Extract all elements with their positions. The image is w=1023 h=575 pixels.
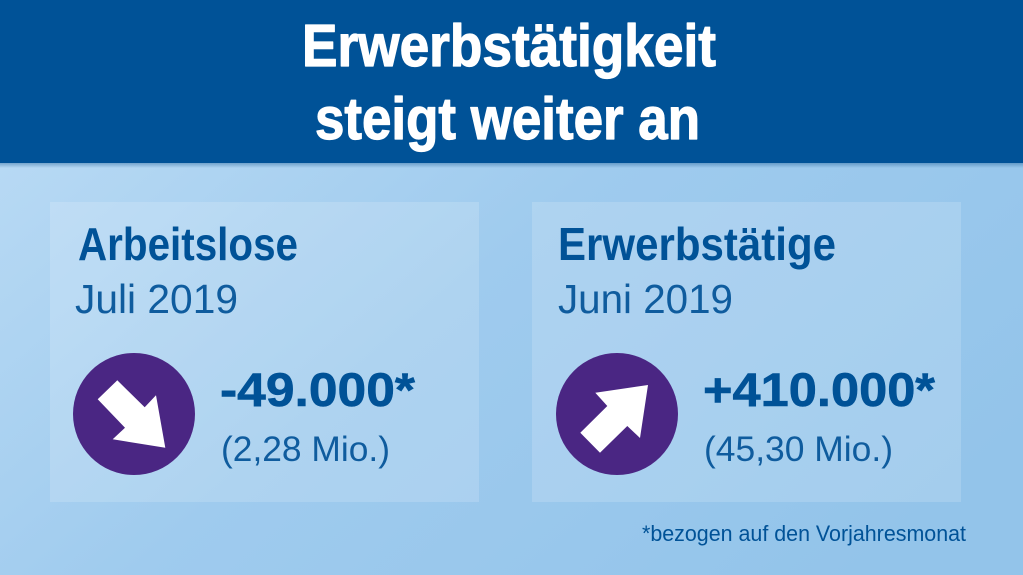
icon: arrow down in circle xyxy=(73,353,195,475)
title: Erwerbstätigkeit xyxy=(302,13,716,79)
heading: Arbeitslose: Arbeitslose xyxy=(78,218,298,270)
panel: Arbeitslose xyxy=(50,202,479,502)
footnote: *bezogen auf den Vorjahresmonat xyxy=(642,521,966,546)
panel: Erwerbstätige xyxy=(532,202,961,502)
text: 45,30 Mio.: (45,30 Mio.) xyxy=(704,430,893,469)
title: steigt weiter an xyxy=(315,86,700,152)
text: 2,28 Mio.: (2,28 Mio.) xyxy=(221,430,390,469)
icon: arrow up in circle xyxy=(556,353,678,475)
value: -49.000*: -49.000* xyxy=(220,363,416,416)
text: Juni 2019: Juni 2019 xyxy=(558,276,733,322)
panel: title banner xyxy=(0,0,1023,163)
heading: Erwerbstätige: Erwerbstätige xyxy=(558,218,836,270)
value: +410.000*: +410.000* xyxy=(703,363,936,416)
text: Juli 2019: Juli 2019 xyxy=(75,276,238,322)
title xyxy=(302,13,716,152)
